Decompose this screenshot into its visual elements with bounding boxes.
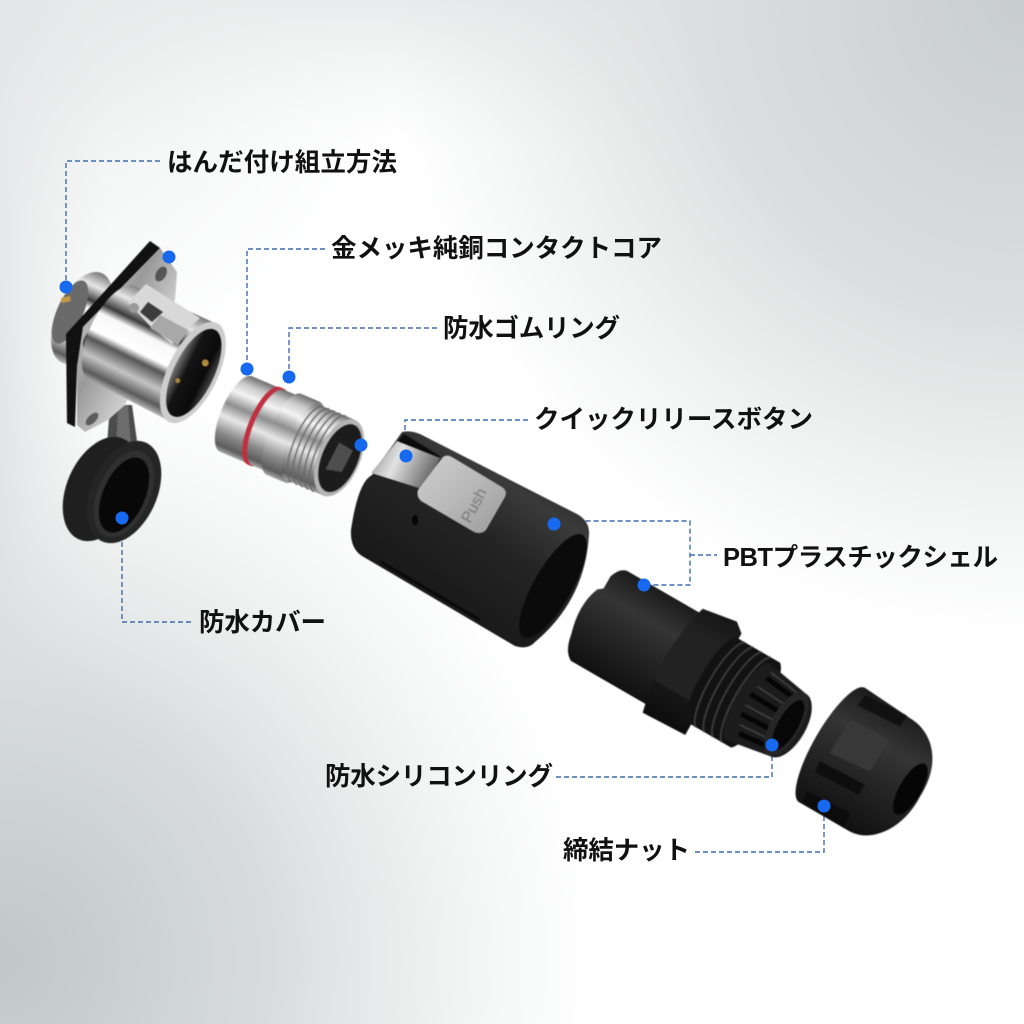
leader line: silicone ring (556, 745, 772, 777)
marker dots (60, 250, 830, 812)
label: tightening nut: 締結ナット (563, 837, 690, 865)
flange connector (38, 241, 239, 433)
label: gold-plated pure copper contact core: 金メッキ純銅コンタクトコア (331, 235, 662, 263)
label: quick release button: クイックリリースボタン (534, 406, 813, 434)
leader line: tightening nut (695, 806, 824, 852)
label: waterproof silicone ring: 防水シリコンリング (325, 762, 553, 791)
PBT plastic shell (351, 431, 599, 647)
leader line: PBT shell (554, 521, 717, 585)
gland body (551, 551, 836, 788)
leader line: gold-plated core (247, 249, 325, 369)
label: waterproof rubber ring: 防水ゴムリング (443, 314, 620, 343)
tightening nut (783, 679, 953, 853)
quick release button (371, 434, 506, 533)
copper contact core with red ring (205, 368, 376, 506)
leader line: soldering method (66, 161, 160, 287)
label: soldering assembly method: はんだ付け組立方法 (167, 149, 397, 177)
push label: Push (459, 486, 491, 526)
label: waterproof cover: 防水カバー (199, 609, 326, 637)
waterproof cover (48, 405, 176, 555)
label: PBT plastic shell: PBTプラスチックシェル (723, 544, 998, 572)
leader line: waterproof cover (122, 518, 193, 622)
leader line: quick release button (405, 420, 528, 456)
leader line: waterproof rubber ring (289, 328, 437, 377)
